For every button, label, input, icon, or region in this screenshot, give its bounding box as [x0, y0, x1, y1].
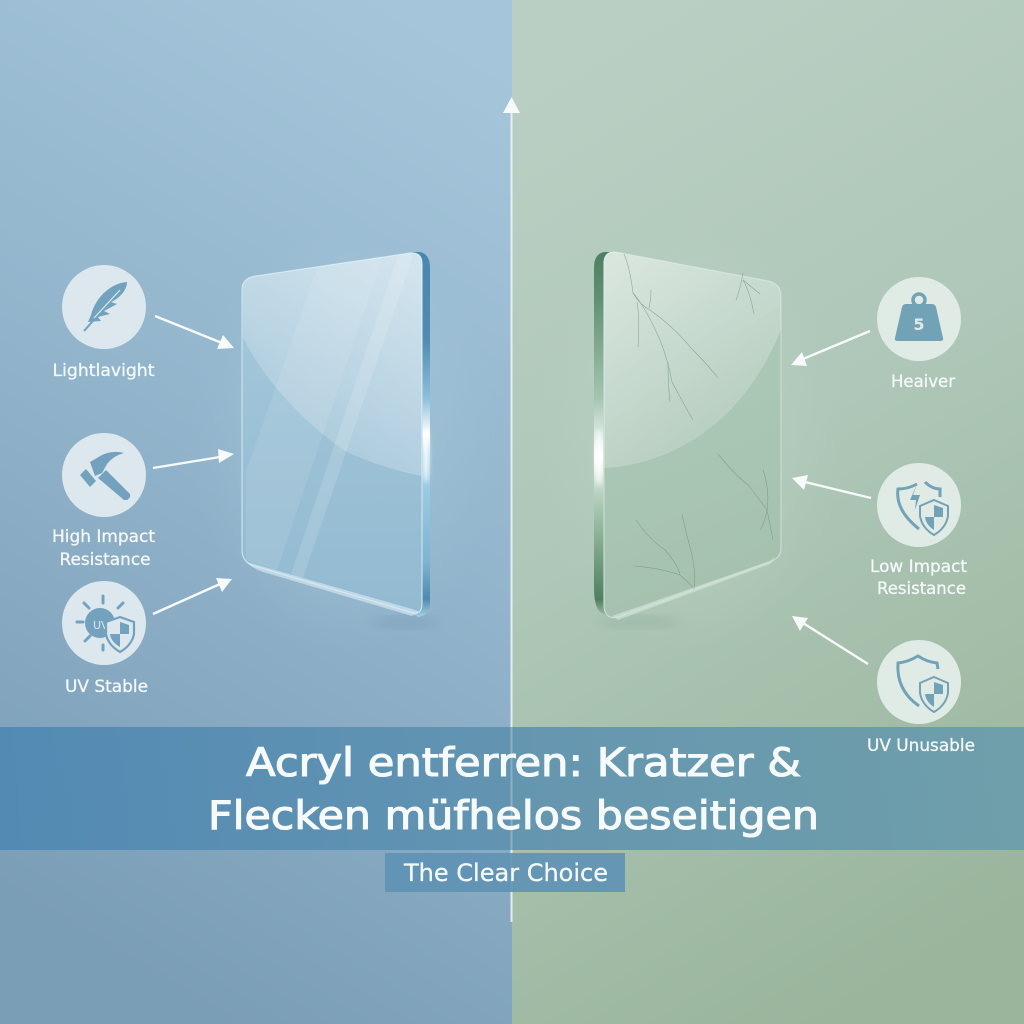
title: Flecken müfhelos beseitigen: [208, 794, 819, 839]
background: right panel: [512, 0, 1024, 1024]
label: Heaiver: [891, 372, 955, 391]
item: High Impact Resistance: [52, 433, 234, 569]
label: High Impact: [52, 527, 156, 546]
arrow: [153, 578, 232, 614]
item: UV Unusable: [792, 616, 961, 724]
label: UV Unusable: UV Unusable: [867, 736, 975, 755]
arrow: [792, 475, 871, 498]
title: Acryl entferren: Kratzer &: [246, 741, 801, 786]
item: Low Impact Resistance: [792, 463, 968, 598]
background: left panel: [0, 0, 512, 1024]
label: Resistance: [877, 579, 966, 598]
title: [208, 741, 819, 839]
label: UV Stable: [65, 677, 148, 696]
pane face: [242, 253, 422, 613]
title banner: [0, 727, 1024, 850]
subtitle tag: The Clear Choice: [403, 859, 608, 887]
arrow: [155, 316, 234, 349]
arrow: [792, 616, 868, 664]
arrow: [153, 449, 234, 468]
arrow: [791, 331, 870, 366]
pane reflections: [242, 250, 422, 578]
icon: sun with shield: UV: [93, 619, 109, 632]
label: Resistance: [60, 550, 150, 569]
label: [52, 527, 156, 569]
item: Heavier: [791, 277, 961, 391]
label: [870, 557, 968, 598]
center divider arrow: [503, 97, 520, 922]
icon: weight: 5: [913, 315, 925, 334]
icon: hammer: [62, 433, 146, 517]
pane face: [604, 252, 781, 618]
item: UV Stable: [62, 578, 232, 696]
subtitle tag: [385, 853, 625, 892]
icon: shield: [877, 640, 961, 724]
cracked glass pane: [594, 250, 781, 626]
item: Lightweight: [52, 265, 234, 380]
pane edge: [410, 252, 430, 617]
label: Low Impact: [870, 557, 968, 576]
icon: weight: [877, 277, 961, 361]
pane edge: [594, 252, 612, 618]
cracks: [624, 254, 773, 590]
glow behind panes: [225, 260, 810, 620]
acrylic pane: [242, 250, 437, 626]
icon: cracked shield: [877, 463, 961, 547]
icon: feather: [62, 265, 146, 349]
icon: sun with shield: [62, 581, 146, 665]
label: Lightlavight: [52, 361, 155, 380]
pane reflection: [604, 250, 781, 468]
